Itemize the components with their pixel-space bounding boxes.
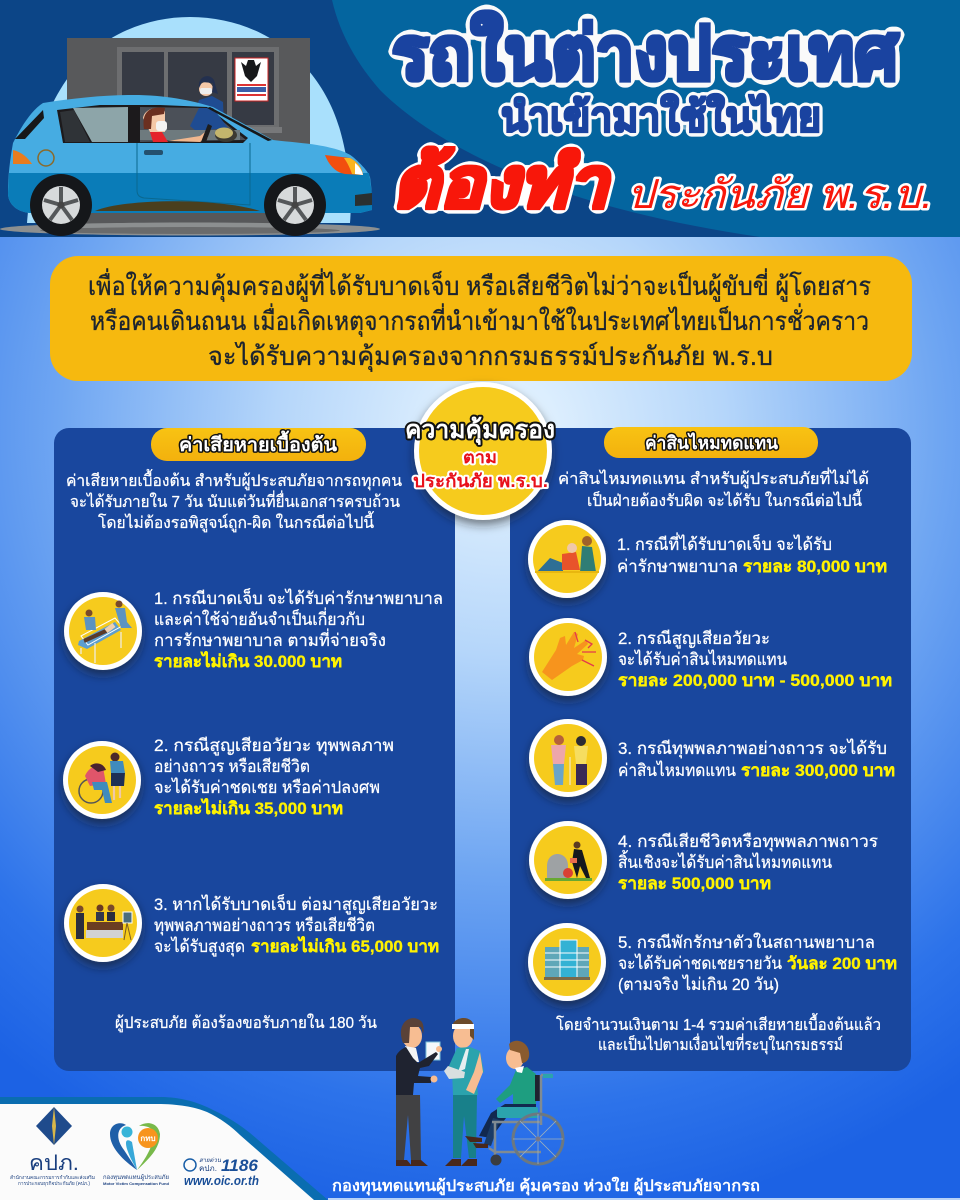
logo: OIC diamond: สำนักงานคณะกรรมการกำกับและส่งเสริม xyxy=(10,1174,95,1181)
title line 3: must do: ต้องทำ xyxy=(392,144,611,222)
centre badge: protection under compulsory insurance: ความคุ้มครอง xyxy=(405,416,555,446)
logo: motor victim compensation fund: กองทุนทดแทนผู้ประสบภัย xyxy=(103,1174,169,1181)
icon: first aid xyxy=(528,520,606,598)
logo: OIC diamond: คปภ. xyxy=(29,1152,79,1175)
logo: hotline 1186: สายด่วน xyxy=(199,1157,222,1164)
item 1: injury cost xyxy=(528,520,887,598)
text: initial damages intro xyxy=(66,469,402,533)
intro yellow box: หรือคนเดินถนน เมื่อเกิดเหตุจากรถที่นำเข้ามาใช้ในประเทศไทยเป็นการชั่วคราว xyxy=(90,303,869,337)
item 2: loss of organ: 2. กรณีสูญเสียอวัยวะ xyxy=(618,629,770,649)
figure: driver xyxy=(143,108,237,142)
icon: hospital xyxy=(528,923,606,1001)
figure: agent in suit xyxy=(396,1018,442,1166)
item 3: injured then disabled: รายละไม่เกิน 65,000 บาท xyxy=(251,936,439,956)
item 2: disability or death: 2. กรณีสูญเสียอวัยวะ ทุพพลภาพ xyxy=(154,736,394,756)
caption: fund slogan: กองทุนทดแทนผู้ประสบภัย คุ้มครอง ห่วงใย ผู้ประสบภัยจากรถ xyxy=(332,1176,760,1197)
item 2: disability or death: รายละไม่เกิน 35,000 บาท xyxy=(154,798,343,818)
item 1: injury cost: 1. กรณีที่ได้รับบาดเจ็บ จะได้รับ xyxy=(617,532,832,554)
header banner xyxy=(0,0,960,237)
item 5: hospital stay: (ตามจริง ไม่เกิน 20 วัน) xyxy=(618,974,779,994)
item 3: injured then disabled xyxy=(64,884,439,962)
icon: headlight xyxy=(325,155,363,175)
item 2: loss of organ: รายละ 200,000 บาท - 500,000 บาท xyxy=(618,671,892,690)
text: compensation intro: เป็นฝ่ายต้องรับผิด จะได้รับ ในกรณีต่อไปนี้ xyxy=(587,489,862,510)
logo: hotline 1186 xyxy=(184,1156,259,1188)
item 1: injury: รายละไม่เกิน 30.000 บาท xyxy=(154,651,342,671)
icon: two people, one with cane xyxy=(529,719,607,797)
item 2: disability or death: จะได้รับค่าชดเชย หรือค่าปลงศพ xyxy=(154,777,380,797)
heading pill: initial damages xyxy=(151,428,366,461)
car windows xyxy=(57,105,248,143)
item 1: injury: การรักษาพยาบาล ตามที่จ่ายจริง xyxy=(154,628,386,650)
logo: OIC diamond xyxy=(10,1107,95,1187)
heading pill: compensation: ค่าสินไหมทดแทน xyxy=(645,432,779,453)
item 3: permanent disability: รายละ 300,000 บาท xyxy=(741,761,895,780)
text: conditions note: และเป็นไปตามเงื่อนไขที่ระบุในกรมธรรม์ xyxy=(598,1033,843,1055)
intro yellow box: เพื่อให้ความคุ้มครองผู้ที่ได้รับบาดเจ็บ หรือเสียชีวิตไม่ว่าจะเป็นผู้ขับขี่ ผู้โดยสาร xyxy=(88,268,871,302)
logo: OIC diamond: การประกอบธุรกิจประกันภัย (คปภ.) xyxy=(18,1180,90,1187)
logo: motor victim compensation fund xyxy=(103,1123,170,1186)
text: claim within 180 days: ผู้ประสบภัย ต้องร้องขอรับภายใน 180 วัน xyxy=(115,1013,377,1033)
item 2: disability or death: อย่างถาวร หรือเสียชีวิต xyxy=(154,757,310,776)
item 3: permanent disability: 3. กรณีทุพพลภาพอย่างถาวร จะได้รับ xyxy=(618,738,887,759)
item 1: injury: และค่าใช้จ่ายอันจำเป็นเกี่ยวกับ xyxy=(154,607,365,629)
intro yellow box: จะได้รับความคุ้มครองจากกรมธรรม์ประกันภัย พ.ร.บ xyxy=(208,341,773,372)
item 3: injured then disabled: จะได้รับสูงสุด xyxy=(154,936,245,957)
icon: grave visit xyxy=(529,821,607,899)
item 4: death or total disability: สิ้นเชิงจะได้รับค่าสินไหมทดแทน xyxy=(618,850,832,872)
item 2: loss of organ: จะได้รับค่าสินไหมทดแทน xyxy=(618,649,787,669)
item 1: injury xyxy=(64,587,443,671)
icon: funeral xyxy=(64,884,142,962)
item 1: injury: 1. กรณีบาดเจ็บ จะได้รับค่ารักษาพยาบาล xyxy=(154,587,443,608)
intro yellow box xyxy=(50,256,912,381)
text: initial damages intro: โดยไม่ต้องรอพิสูจน์ถูก-ผิด ในกรณีต่อไปนี้ xyxy=(98,511,374,533)
centre badge: protection under compulsory insurance: ตาม xyxy=(463,448,497,467)
item 5: hospital stay: จะได้รับค่าชดเชยรายวัน xyxy=(618,953,782,973)
car body xyxy=(8,95,372,213)
icon: injured hand xyxy=(529,618,607,696)
title line 2: นำเข้ามาใช้ในไทย xyxy=(501,93,821,140)
figure: officer xyxy=(190,76,224,126)
illustration: agent, injured patient and wheelchair user xyxy=(396,1018,563,1166)
title line 3: compulsory insurance: ประกันภัย พ.ร.บ. xyxy=(627,173,933,217)
item 5: hospital stay xyxy=(528,923,897,1001)
item 1: injury cost: ค่ารักษาพยาบาล xyxy=(617,557,738,576)
item 2: loss of organ xyxy=(529,618,892,696)
text: initial damages intro: จะได้รับภายใน 7 วัน นับแต่วันที่ยื่นเอกสารครบถ้วน xyxy=(70,490,400,511)
bottom edge strip xyxy=(328,1198,960,1200)
figure: injured patient xyxy=(444,1018,484,1166)
text: compensation intro xyxy=(558,467,869,510)
item 4: death or total disability xyxy=(529,821,878,899)
footer logo area xyxy=(0,1097,328,1200)
item 3: injured then disabled: ทุพพลภาพอย่างถาวร หรือเสียชีวิต xyxy=(154,916,375,936)
item 3: permanent disability xyxy=(529,719,895,797)
centre badge: protection under compulsory insurance xyxy=(405,382,555,520)
text: conditions note xyxy=(556,1013,881,1055)
logo: hotline 1186: 1186 xyxy=(221,1156,259,1175)
panel: compensation xyxy=(510,427,911,1071)
text: compensation intro: ค่าสินไหมทดแทน สำหรับผู้ประสบภัยที่ไม่ได้ xyxy=(558,467,869,489)
title line 1: รถในต่างประเทศ xyxy=(392,10,899,95)
text: conditions note: โดยจำนวนเงินตาม 1-4 รวมค่าเสียหายเบื้องต้นแล้ว xyxy=(556,1013,881,1034)
heading pill: compensation xyxy=(604,427,818,458)
figure: person in wheelchair xyxy=(465,1041,563,1166)
logo: motor victim compensation fund: กทบ xyxy=(140,1134,156,1143)
logo: motor victim compensation fund: Motor Victim Compensation Fund xyxy=(103,1181,170,1186)
item 3: permanent disability: ค่าสินไหมทดแทน xyxy=(618,760,736,780)
illustration: car at checkpoint booth xyxy=(0,17,380,236)
panel: initial damages xyxy=(54,428,455,1071)
icon: garuda sign xyxy=(235,58,268,101)
item 5: hospital stay: 5. กรณีพักรักษาตัวในสถานพยาบาล xyxy=(618,932,875,952)
icon: wheelchair with carer xyxy=(63,741,141,819)
item 2: disability or death xyxy=(63,736,394,819)
item 3: injured then disabled: 3. หากได้รับบาดเจ็บ ต่อมาสูญเสียอวัยวะ xyxy=(154,893,438,915)
item 4: death or total disability: 4. กรณีเสียชีวิตหรือทุพพลภาพถาวร xyxy=(618,832,878,852)
item 4: death or total disability: รายละ 500,000 บาท xyxy=(618,874,771,893)
icon: stretcher xyxy=(64,592,142,670)
text: initial damages intro: ค่าเสียหายเบื้องต้น สำหรับผู้ประสบภัยจากรถทุกคน xyxy=(66,469,402,491)
centre badge: protection under compulsory insurance: ประกันภัย พ.ร.บ. xyxy=(413,471,548,491)
logo: hotline 1186: www.oic.or.th xyxy=(184,1173,259,1188)
logo: hotline 1186: คปภ. xyxy=(199,1164,217,1173)
item 5: hospital stay: วันละ 200 บาท xyxy=(787,954,897,973)
heading pill: initial damages: ค่าเสียหายเบื้องต้น xyxy=(179,430,337,456)
item 1: injury cost: รายละ 80,000 บาท xyxy=(743,557,887,576)
ground and wheels xyxy=(0,174,380,236)
